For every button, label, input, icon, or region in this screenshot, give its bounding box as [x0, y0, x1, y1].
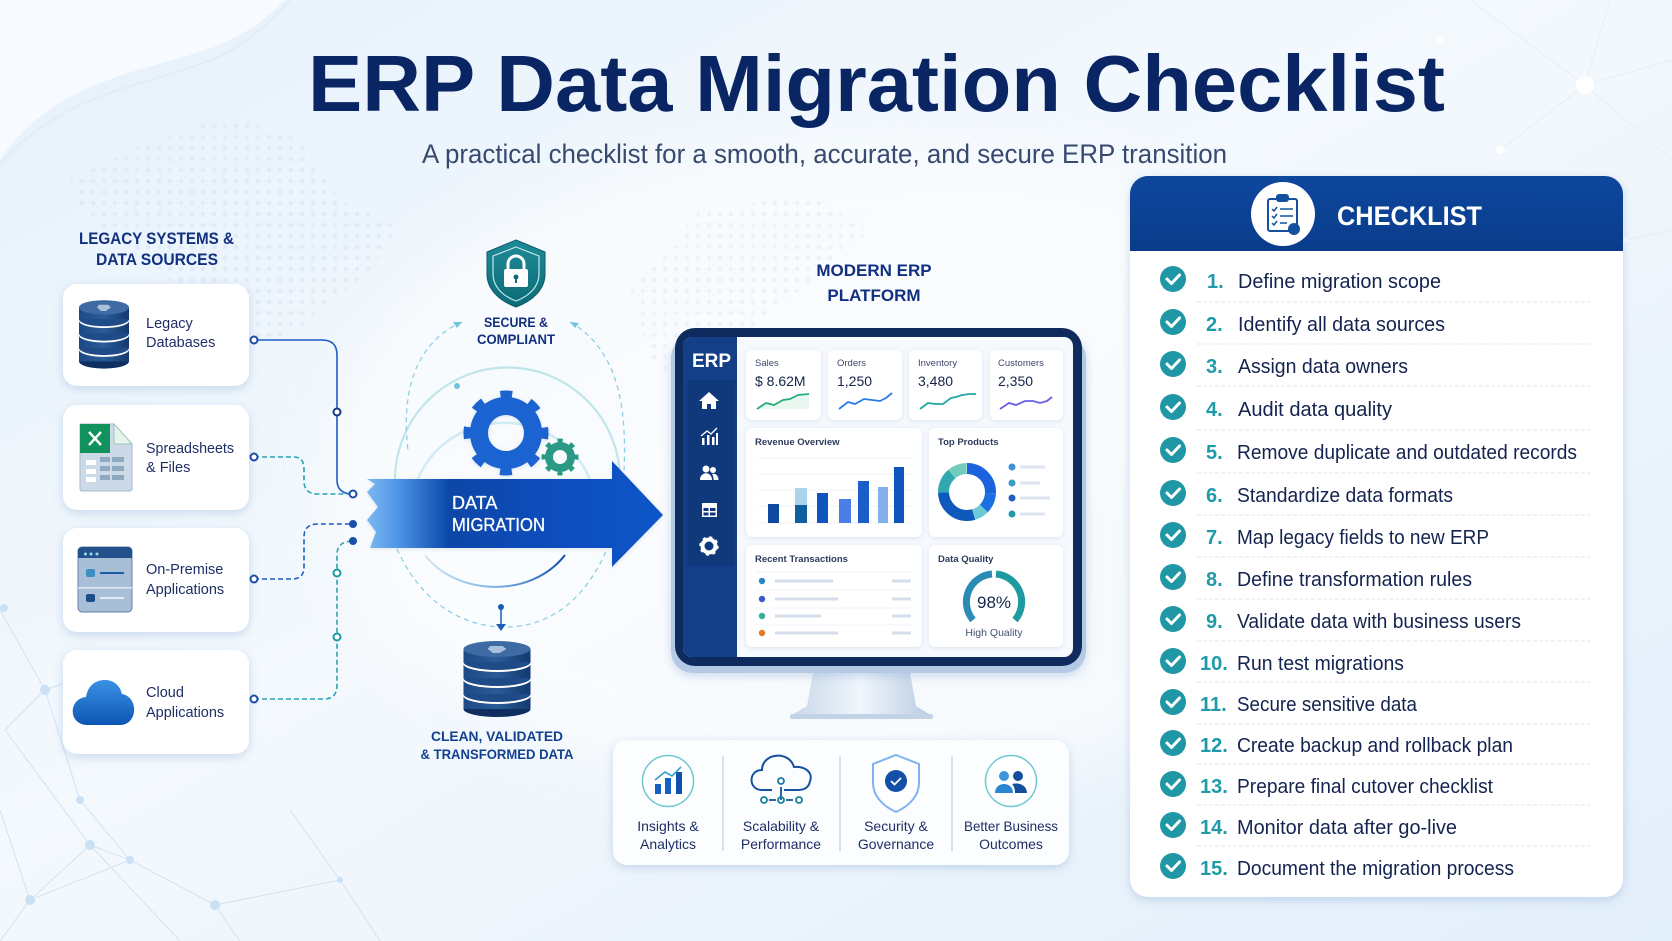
sidebar — [683, 337, 737, 657]
title: ERP Data Migration Checklist — [308, 39, 1445, 128]
item 1: 1. — [1207, 271, 1224, 293]
list: recent transactions: Recent Transactions — [755, 554, 848, 565]
icon: spreadsheet — [80, 424, 132, 491]
item 6 — [1160, 480, 1453, 507]
label: secure and compliant — [477, 314, 555, 347]
sidebar: ERP — [692, 351, 731, 372]
item 2: Identify all data sources — [1238, 314, 1445, 336]
item 12: Create backup and rollback plan — [1237, 735, 1513, 757]
chart: top products: Top Products — [938, 437, 999, 448]
icon: home — [699, 392, 719, 409]
item 13 — [1160, 771, 1493, 798]
panel: benefits — [613, 740, 1069, 865]
item 11: 11. — [1200, 694, 1227, 716]
icon: database — [79, 300, 129, 369]
KPI: orders: Orders — [837, 358, 866, 369]
icon: settings — [700, 538, 718, 554]
item 15 — [1160, 853, 1514, 880]
panel: on-premise: On-Premise — [146, 562, 223, 578]
item 5: 5. — [1206, 442, 1223, 464]
panel: legacy databases: Legacy — [146, 316, 194, 332]
item 9: 9. — [1206, 611, 1223, 633]
icon: table — [702, 503, 717, 517]
item 12 — [1160, 730, 1513, 757]
panel: cloud applications: Cloud — [146, 685, 184, 701]
KPI: sales: Sales — [755, 358, 779, 369]
item 10: Run test migrations — [1237, 653, 1404, 675]
arrow: data migration: MIGRATION — [452, 515, 545, 535]
benefit label: outcomes — [964, 818, 1058, 852]
icon: chart — [701, 428, 718, 445]
icon: insights — [642, 756, 694, 806]
item 8 — [1160, 564, 1472, 591]
gauge: data quality: Data Quality — [938, 554, 994, 565]
KPI: customers: Customers — [998, 358, 1044, 369]
item 12: 12. — [1200, 735, 1228, 757]
benefit label: security: Security & — [864, 818, 929, 834]
gauge: data quality — [929, 545, 1063, 647]
chart: top products — [929, 428, 1063, 537]
label: clean data — [420, 728, 574, 762]
item 14: 14. — [1200, 817, 1228, 839]
benefit label: outcomes: Better Business — [964, 818, 1058, 834]
item 13: Prepare final cutover checklist — [1237, 776, 1493, 798]
panel: on-premise: Applications — [146, 582, 224, 598]
heading: modern ERP platform: MODERN ERP — [816, 261, 932, 280]
item 9: Validate data with business users — [1237, 611, 1521, 633]
label: secure and compliant: COMPLIANT — [477, 331, 555, 347]
label: secure and compliant: SECURE & — [484, 314, 548, 330]
icon: shield lock — [487, 240, 545, 307]
item 6: Standardize data formats — [1237, 485, 1453, 507]
item 7: Map legacy fields to new ERP — [1237, 527, 1489, 549]
benefit label: outcomes: Outcomes — [979, 836, 1043, 852]
item 4 — [1160, 394, 1392, 421]
item 3: Assign data owners — [1238, 356, 1408, 378]
panel: spreadsheets: Spreadsheets — [146, 441, 234, 457]
item 9 — [1160, 606, 1521, 633]
benefit label: security: Governance — [858, 836, 934, 852]
KPI: inventory — [909, 350, 982, 420]
panel: legacy databases — [63, 284, 249, 386]
chart: revenue overview: Revenue Overview — [755, 437, 840, 448]
item 3: 3. — [1206, 356, 1223, 378]
item 8: 8. — [1206, 569, 1223, 591]
item 11: Secure sensitive data — [1237, 694, 1418, 716]
benefit label: insights: Analytics — [640, 836, 696, 852]
heading: legacy systems: LEGACY SYSTEMS & — [79, 229, 234, 248]
icon: users — [700, 466, 718, 480]
item 14 — [1160, 812, 1457, 839]
gauge: data quality: High Quality — [965, 627, 1023, 639]
item 5: Remove duplicate and outdated records — [1237, 442, 1577, 464]
arrow: down to clean data — [496, 604, 506, 631]
gauge: data quality: 98% — [977, 593, 1011, 612]
benefit label: insights: Insights & — [637, 818, 699, 834]
icon: cloud network — [752, 756, 811, 803]
panel: cloud applications: Applications — [146, 705, 224, 721]
icon: security shield — [873, 755, 919, 812]
KPI: orders — [828, 350, 902, 420]
benefit label: scalability: Scalability & — [743, 818, 820, 834]
checklist header: CHECKLIST — [1337, 201, 1482, 231]
item 14: Monitor data after go-live — [1237, 817, 1457, 839]
arrow: data migration — [367, 461, 663, 567]
panel: spreadsheets: & Files — [146, 460, 190, 476]
arrow: data migration: DATA — [452, 493, 497, 513]
icon: people — [986, 756, 1036, 806]
icon: application window — [78, 547, 132, 612]
heading: modern ERP platform — [816, 261, 932, 305]
chart: revenue overview — [746, 428, 922, 537]
rings around migration — [395, 322, 625, 627]
benefit label: insights — [637, 818, 699, 852]
label: clean data: CLEAN, VALIDATED — [431, 728, 563, 744]
item 4: 4. — [1206, 399, 1223, 421]
icon: clean database — [464, 641, 530, 717]
item 6: 6. — [1206, 485, 1223, 507]
icon: small gear — [544, 441, 576, 473]
KPI: orders: 1,250 — [837, 373, 872, 389]
benefit label: security — [858, 818, 934, 852]
panel: legacy databases: Databases — [146, 335, 215, 351]
monitor stand — [790, 673, 933, 719]
benefit label: scalability: Performance — [741, 836, 821, 852]
item 13: 13. — [1200, 776, 1228, 798]
item 10 — [1160, 648, 1404, 675]
panel: spreadsheets — [63, 405, 249, 510]
KPI: sales: $ 8.62M — [755, 373, 806, 389]
KPI: customers — [990, 350, 1063, 420]
list: recent transactions — [746, 545, 922, 647]
panel: on-premise — [63, 528, 249, 632]
item 11 — [1160, 689, 1418, 716]
panel: cloud applications — [63, 650, 249, 754]
panel: checklist — [1130, 176, 1623, 897]
KPI: customers: 2,350 — [998, 373, 1033, 389]
item 15: Document the migration process — [1237, 858, 1514, 880]
checklist header — [1130, 176, 1623, 251]
label: clean data: & TRANSFORMED DATA — [420, 746, 574, 762]
icon: cloud — [73, 680, 134, 725]
item 7: 7. — [1206, 527, 1223, 549]
KPI: inventory: Inventory — [918, 358, 957, 369]
item 15: 15. — [1200, 858, 1228, 880]
item 10: 10. — [1200, 653, 1228, 675]
icon: clipboard — [1268, 195, 1299, 234]
item 1: Define migration scope — [1238, 271, 1441, 293]
item 4: Audit data quality — [1238, 399, 1392, 421]
item 8: Define transformation rules — [1237, 569, 1472, 591]
heading: legacy systems: DATA SOURCES — [96, 250, 218, 269]
item 2: 2. — [1206, 314, 1223, 336]
item 3 — [1160, 351, 1408, 378]
heading: legacy systems — [79, 229, 234, 269]
subtitle: A practical checklist for a smooth, accurate, and secure ERP transition — [422, 139, 1227, 169]
item 2 — [1160, 309, 1445, 336]
KPI: inventory: 3,480 — [918, 373, 953, 389]
item 5 — [1160, 437, 1577, 464]
item 1 — [1160, 266, 1441, 293]
heading: modern ERP platform: PLATFORM — [827, 286, 921, 305]
connectors — [250, 336, 357, 702]
monitor — [671, 328, 1086, 719]
icon: large gear — [470, 397, 542, 469]
item 7 — [1160, 522, 1489, 549]
KPI: sales — [746, 350, 821, 420]
benefit label: scalability — [741, 818, 821, 852]
